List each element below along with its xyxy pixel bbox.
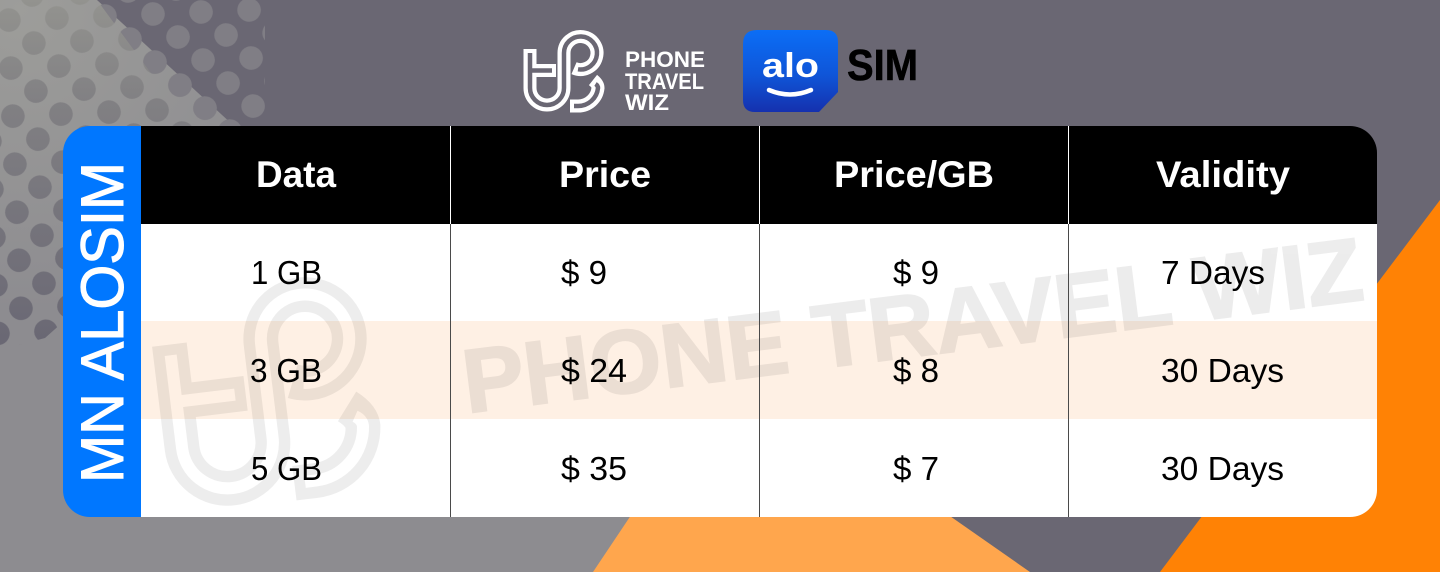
brand name: Phone Travel Wiz: WIZ (625, 90, 669, 115)
row: 1 GB plan: 1 GB (251, 255, 322, 292)
light orange triangle (593, 412, 1030, 572)
row: 3 GB plan: $ 8 (893, 353, 939, 390)
row: 5 GB plan: 30 Days (1161, 451, 1284, 488)
row: 3 GB plan: 3 GB (250, 353, 322, 390)
row: 3 GB plan: $ 24 (561, 353, 627, 390)
row: 1 GB plan: $ 9 (561, 255, 607, 292)
table body rows (141, 224, 1377, 517)
brand name: Phone Travel Wiz: TRAVEL (625, 69, 704, 94)
row: 1 GB plan: 7 Days (1161, 255, 1265, 292)
watermark logo (152, 277, 380, 506)
sidebar: plan name: MN ALOSIM (69, 162, 136, 483)
table header background (141, 126, 1377, 224)
row: 5 GB plan (252, 455, 1283, 487)
halftone dots pattern (0, 0, 265, 345)
brand name: Phone Travel Wiz: PHONE (625, 47, 705, 72)
row: 3 GB plan (251, 357, 1283, 389)
table header labels (258, 160, 1290, 194)
icon: Phone Travel Wiz logo (524, 30, 604, 112)
icon: alo SIM card (743, 30, 838, 112)
row: 3 GB plan: 30 Days (1161, 353, 1284, 390)
table header labels: Price/GB (834, 154, 994, 195)
brand name: Phone Travel Wiz (625, 47, 705, 115)
row: 5 GB plan: 5 GB (251, 451, 322, 488)
row: 1 GB plan: $ 9 (893, 255, 939, 292)
brand name: SIM: SIM (847, 41, 918, 90)
pricing table panel (63, 126, 1377, 533)
row: 5 GB plan: $ 7 (893, 451, 939, 488)
watermark text: PHONE TRAVEL WIZ (457, 220, 1368, 433)
header logos (524, 30, 916, 112)
table header labels: Price (559, 154, 651, 195)
table header labels: Validity (1156, 154, 1290, 195)
icon: alo SIM card: alo (762, 47, 819, 85)
row: 5 GB plan: $ 35 (561, 451, 627, 488)
row: 1 GB plan (253, 259, 1264, 291)
column dividers (450, 126, 1068, 517)
dark orange triangle (1160, 200, 1440, 572)
table header labels: Data (256, 154, 336, 195)
